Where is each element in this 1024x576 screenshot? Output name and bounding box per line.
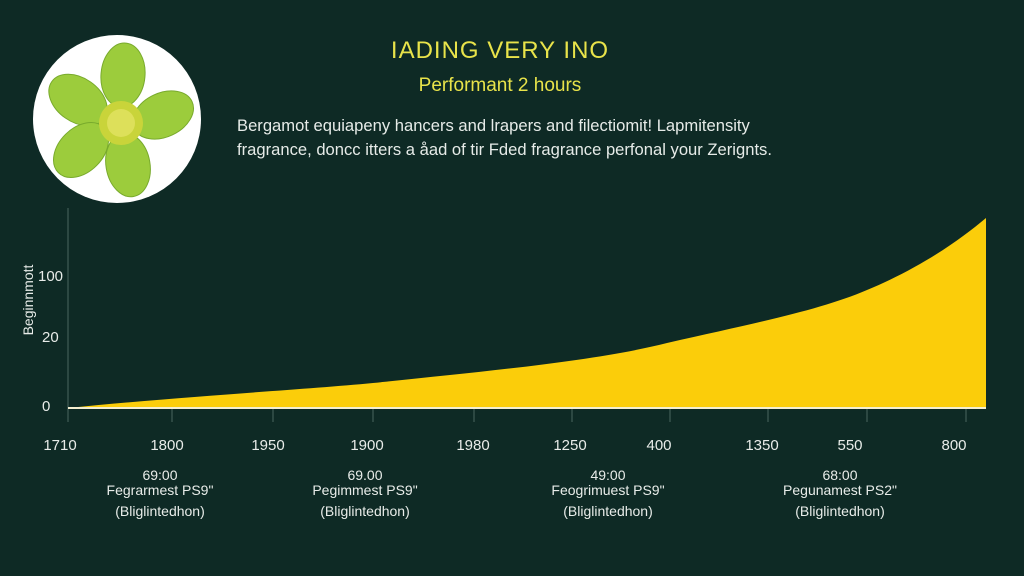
chart: area: 550 <box>837 437 863 454</box>
text: (Bliglintedhon) <box>563 503 653 519</box>
chart: area: 100 <box>38 268 63 285</box>
chart: area: 800 <box>941 437 967 454</box>
chart: area: 1710 <box>43 437 77 454</box>
legend labels <box>107 467 897 519</box>
text: (Bliglintedhon) <box>320 503 410 519</box>
text: (Bliglintedhon) <box>115 503 205 519</box>
icon: bergamot leaf circle <box>33 35 201 203</box>
chart: area: 1900 <box>350 437 384 454</box>
description text: Bergamot equiapeny hancers and lrapers and filectiomit! Lapmitensity fragrance, doncc itters a åad of tir Fded fragrance perfonal your Zerignts. <box>237 116 772 159</box>
chart: area: 0 <box>42 398 50 415</box>
text: Pegimmest PS9" <box>312 482 418 498</box>
chart: area: 1950 <box>251 437 285 454</box>
chart: area: 1250 <box>553 437 587 454</box>
text: 69.00 <box>347 467 383 483</box>
chart: area: 1800 <box>150 437 184 454</box>
title: IADING VERY INO <box>391 37 609 64</box>
text: 69:00 <box>142 467 178 483</box>
text: 49:00 <box>590 467 626 483</box>
text: Feogrimuest PS9" <box>551 482 665 498</box>
chart: area: 400 <box>646 437 672 454</box>
text: Pegunamest PS2" <box>783 482 897 498</box>
text: (Bliglintedhon) <box>795 503 885 519</box>
chart: area: 20 <box>42 329 59 346</box>
chart: area: 1980 <box>456 437 490 454</box>
y axis title: Beginnmott <box>20 265 36 335</box>
subtitle: Performant 2 hours <box>419 75 581 96</box>
text: 68:00 <box>822 467 858 483</box>
text: Fegrarmest PS9" <box>107 482 213 498</box>
chart: area: 1350 <box>745 437 779 454</box>
